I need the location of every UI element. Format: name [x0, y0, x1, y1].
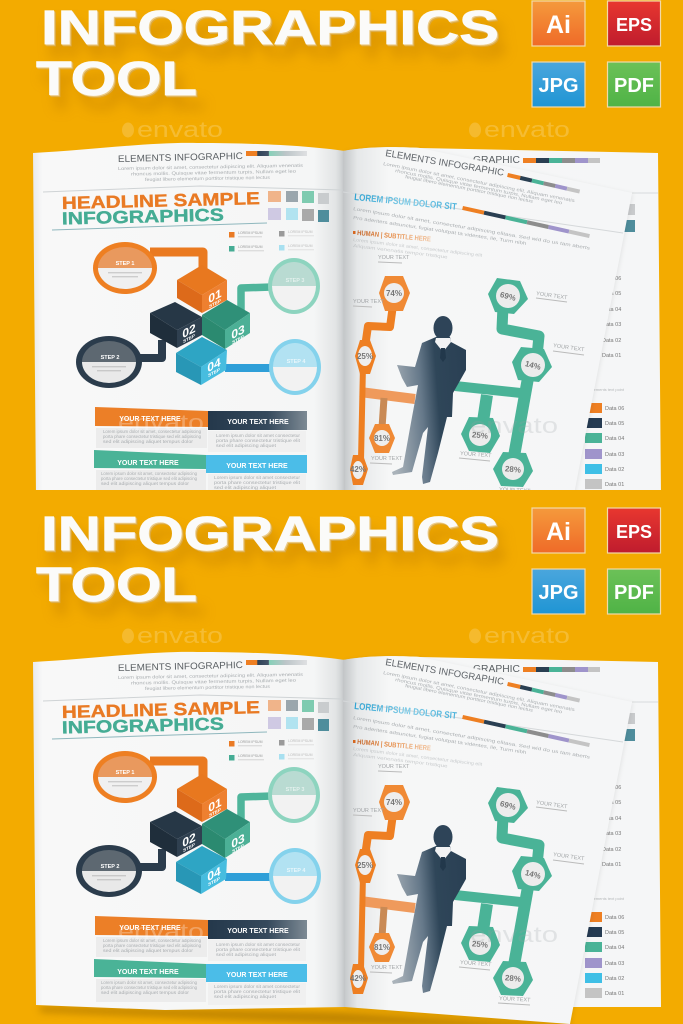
- section heading: LOREM IPSUM DOLOR SIT: [354, 701, 457, 722]
- callout labels: YOUR TEXT: [536, 291, 568, 301]
- page header: Lorem ipsum dolor sit amet, consectetur adipiscing elit. Aliquam venenatis: [118, 672, 304, 680]
- page header: Lorem ipsum dolor sit amet, consectetur adipiscing elit. Aliquam venenatis: [118, 163, 304, 171]
- hexagon 25% orange: [355, 849, 376, 883]
- hexagon 14%: 14%: [524, 868, 542, 881]
- section heading: Pro aderiters adsunctur, fugiat volutpat ta videntes, lie, Turm nibh: [353, 215, 527, 246]
- step 3 circle: [268, 767, 320, 823]
- cube 02: STEP: [183, 842, 196, 854]
- step 1 circle: [93, 242, 157, 294]
- legend: LOREM IPSUM: [288, 739, 313, 743]
- legend swatches: Data 01: [605, 991, 624, 997]
- legend swatches: Data 04: [605, 945, 624, 951]
- teal tree: [455, 278, 552, 487]
- watermarks: bottom: envato: [484, 623, 570, 648]
- icon: PDF bottom: PDF: [614, 582, 654, 604]
- data labels: Data 01: [602, 862, 621, 868]
- left page: [33, 652, 345, 1010]
- data labels: Elements text point: [590, 896, 625, 901]
- hexagon 69%: 69%: [499, 290, 517, 303]
- legend swatches: [585, 403, 624, 489]
- book spread: bottom: [33, 652, 661, 1024]
- hexagon 25% orange: 25%: [357, 352, 373, 361]
- legend swatches: Data 01: [605, 482, 624, 488]
- step 3 circle: [268, 258, 320, 314]
- hexagon 42%: 42%: [350, 465, 366, 474]
- text blocks: [96, 937, 306, 1005]
- hexagon 74%: 74%: [386, 289, 402, 298]
- legend swatches: Data 02: [605, 976, 624, 982]
- watermark on page: envato: [470, 413, 558, 438]
- text blocks: Lorem ipsum dolor sit amet consectetur: [214, 475, 300, 480]
- cube 04: [176, 337, 227, 385]
- data labels: Data 04: [602, 816, 621, 822]
- right page: back sheet: GRAPHIC: [473, 664, 520, 675]
- right page: back sheet: [343, 656, 661, 1007]
- businessman silhouette: [392, 316, 466, 484]
- headline: [52, 697, 267, 739]
- cube 03: STEP: [232, 334, 245, 346]
- data labels: [590, 785, 625, 901]
- step 4 circle: STEP 4: [287, 868, 306, 874]
- format icons: bottom: [532, 508, 660, 614]
- bar: navy: YOUR TEXT HERE: [227, 419, 289, 426]
- hexagon 25% teal: 25%: [472, 939, 488, 950]
- hexagon 81%: [369, 424, 395, 453]
- front header: Lorem ipsum dolor sit amet, consectetur adipiscing elit. Aliquam venenatis: [383, 161, 576, 203]
- cube 04: STEP: [208, 876, 221, 888]
- watermarks: bottom: [122, 623, 570, 648]
- cube 04: 04: [207, 863, 221, 884]
- step 2 circle: [76, 336, 142, 388]
- callout labels: YOUR TEXT: [460, 451, 492, 459]
- cube 01: STEP: [209, 807, 222, 819]
- cube 04: [176, 846, 227, 894]
- data labels: Data 06: [602, 276, 621, 282]
- legend: [229, 230, 314, 252]
- text blocks: porta phare consectetur tristique elit: [216, 947, 301, 952]
- swatches: [268, 191, 329, 222]
- data labels: [594, 276, 624, 392]
- callout labels: YOUR TEXT: [371, 456, 403, 462]
- callout labels: YOUR TEXT: [499, 996, 531, 1004]
- icon: Ai: Ai: [546, 11, 571, 39]
- title: bottom: INFOGRAPHICS: [41, 507, 499, 561]
- hexagon 25% orange: [355, 340, 376, 374]
- text blocks: [96, 428, 300, 490]
- hexagon 81%: 81%: [374, 434, 390, 443]
- callout labels: YOUR TEXT: [353, 808, 385, 814]
- subtitle: [353, 739, 483, 769]
- section heading: [353, 192, 591, 251]
- front header: [343, 148, 623, 233]
- front header: rhoncus mollis. Quisque vitae fermentum turpis, Nullam eget leo: [395, 168, 563, 206]
- text blocks: porta phare consectetur tristique sed elit adipiscing: [103, 434, 201, 439]
- callout labels: YOUR TEXT: [553, 852, 585, 862]
- section heading: Lorem ipsum dolor sit amet, consectetur adipiscing elitasa. Sed wid do us tam aberts: [353, 715, 591, 760]
- subtitle: Aliquam venenatis tempor tristique: [353, 243, 448, 260]
- bar: blue: YOUR TEXT HERE: [226, 463, 288, 470]
- legend: LOREM IPSUM: [288, 753, 313, 757]
- callout labels: YOUR TEXT: [460, 960, 492, 968]
- title: bottom: [36, 507, 499, 612]
- headline: INFOGRAPHICS: [62, 205, 224, 228]
- cube 02: 02: [182, 829, 196, 850]
- data labels: Elements text point: [590, 387, 625, 392]
- left page: [33, 143, 345, 501]
- right page: back sheet: GRAPHIC: [473, 155, 520, 166]
- bar: orange: YOUR TEXT HERE: [119, 925, 181, 932]
- text blocks: Lorem ipsum dolor sit amet, consectetur adipiscing: [101, 471, 197, 476]
- headline: INFOGRAPHICS: [62, 714, 224, 737]
- back color bar: [523, 158, 600, 163]
- text blocks: sed elit adipiscing aliquet tempus dolor: [101, 990, 190, 995]
- title: top: TOOL: [36, 52, 197, 106]
- watermarks: top: envato: [484, 117, 570, 142]
- bar: navy: YOUR TEXT HERE: [227, 928, 289, 935]
- cube 02: [150, 811, 202, 857]
- step 1 circle: STEP 1: [116, 770, 134, 776]
- legend: LOREM IPSUM: [238, 245, 263, 249]
- icon: Ai bottom: Ai: [546, 518, 571, 546]
- right page: front sheet: [343, 147, 632, 515]
- hexagon 42%: [350, 455, 368, 485]
- hexagon 28%: [493, 961, 533, 996]
- cube 03: 03: [231, 830, 245, 851]
- hexagon 42%: [350, 964, 368, 994]
- cube 01: [177, 265, 227, 313]
- hexagon 14%: 14%: [524, 359, 542, 372]
- page header: [43, 151, 343, 192]
- bar: orange: [95, 407, 208, 427]
- hexagon 25% teal: [461, 417, 500, 453]
- step 4 circle: [269, 339, 321, 395]
- legend: LOREM IPSUM: [288, 244, 313, 248]
- swatches: [268, 700, 329, 731]
- headline: HEADLINE SAMPLE: [62, 188, 260, 213]
- title: bottom: TOOL: [36, 558, 197, 612]
- hexagon 28%: 28%: [505, 973, 521, 984]
- right page: front sheet: [343, 656, 632, 1024]
- watermark on left page: envato: [118, 410, 204, 435]
- hexagon 74%: [379, 785, 410, 820]
- hexagon 69%: [488, 278, 528, 314]
- cube 02: STEP: [183, 333, 196, 345]
- text blocks: Lorem ipsum dolor sit amet consectetur: [214, 984, 300, 989]
- hexagon 74%: [379, 276, 410, 311]
- callout labels: YOUR TEXT: [353, 299, 385, 305]
- subtitle: [353, 230, 483, 260]
- legend: LOREM IPSUM: [238, 754, 263, 758]
- data labels: Data 05: [602, 800, 621, 806]
- subtitle: Lorem ipsum dolor sit amet, consectetur adipiscing elit: [353, 746, 483, 767]
- legend swatches: Data 02: [605, 467, 624, 473]
- connectors: [140, 252, 272, 368]
- text blocks: sed elit adipiscing aliquet: [216, 443, 277, 448]
- text blocks: sed elit adipiscing aliquet tempus dolor: [103, 948, 194, 953]
- callout labels: YOUR TEXT: [553, 343, 585, 353]
- bar: navy: [208, 411, 307, 430]
- page header: [43, 660, 343, 701]
- bar: blue: YOUR TEXT HERE: [226, 972, 288, 979]
- hexagon 14%: [512, 347, 552, 382]
- callout labels: [353, 255, 585, 496]
- right page: back sheet: [343, 147, 661, 498]
- text bars: [94, 916, 307, 982]
- connectors: [140, 761, 272, 877]
- text blocks: Lorem ipsum dolor sit amet, consectetur adipiscing: [103, 938, 201, 943]
- text blocks: porta phare consectetur tristique sed elit adipiscing: [103, 943, 201, 948]
- headline: HEADLINE SAMPLE: [62, 697, 260, 722]
- cube 04: STEP: [208, 367, 221, 379]
- page header: ELEMENTS INFOGRAPHIC: [118, 660, 243, 674]
- cube 01: 01: [208, 285, 222, 306]
- step 1 circle: [93, 751, 157, 803]
- legend: [229, 739, 314, 760]
- data labels: Data 06: [602, 785, 621, 791]
- orange tree: [350, 785, 415, 994]
- front header: Lorem ipsum dolor sit amet, consectetur adipiscing elit. Aliquam venenatis: [383, 670, 576, 712]
- step 2 circle: STEP 2: [101, 864, 119, 870]
- hexagon 14%: [512, 856, 552, 891]
- back color bar: [523, 667, 600, 672]
- legend: LOREM IPSUM: [288, 230, 313, 234]
- watermarks: top: [122, 117, 570, 142]
- orange tree: [350, 276, 415, 485]
- legend swatches: Data 04: [605, 436, 624, 442]
- text blocks: porta phare consectetur tristique elit: [216, 438, 301, 443]
- cube 02: [150, 302, 202, 348]
- data labels: Data 03: [602, 322, 621, 328]
- data labels: Data 02: [602, 847, 621, 853]
- teal tree: [455, 787, 552, 996]
- watermarks: top: envato: [137, 117, 223, 142]
- data labels: Data 03: [602, 831, 621, 837]
- hexagon 25% teal: 25%: [472, 430, 488, 441]
- callout labels: YOUR TEXT: [378, 764, 410, 770]
- callout labels: YOUR TEXT: [499, 487, 531, 495]
- text blocks: Lorem ipsum dolor sit amet, consectetur adipiscing: [103, 429, 201, 434]
- icon: PDF: PDF: [614, 75, 654, 97]
- cube 01: STEP: [209, 298, 222, 310]
- data labels: Data 04: [602, 307, 621, 313]
- cube 03: 03: [231, 321, 245, 342]
- icon: JPG: JPG: [538, 75, 579, 97]
- front header: feugiat libero elementum porttitor tristique non lectus: [405, 174, 534, 204]
- watermark on left page: envato: [118, 919, 204, 944]
- callout labels: YOUR TEXT: [371, 965, 403, 971]
- text blocks: Lorem ipsum dolor sit amet consectetur: [216, 433, 300, 438]
- hexagon 25% orange: 25%: [357, 861, 373, 870]
- text blocks: Lorem ipsum dolor sit amet, consectetur adipiscing: [101, 980, 197, 985]
- legend: LOREM IPSUM: [238, 740, 263, 744]
- text bars: [94, 407, 307, 473]
- section heading: [353, 701, 591, 760]
- front header: ELEMENTS INFOGRAPHIC: [385, 148, 505, 179]
- subtitle: Aliquam venenatis tempor tristique: [353, 752, 448, 769]
- watermarks: bottom: envato: [137, 623, 223, 648]
- book shadow: bottom: [40, 1006, 570, 1024]
- hexagon 81%: [369, 933, 395, 962]
- hexagon 74%: 74%: [386, 798, 402, 807]
- subtitle: Lorem ipsum dolor sit amet, consectetur adipiscing elit: [353, 237, 483, 258]
- bar: teal: YOUR TEXT HERE: [117, 460, 179, 467]
- hexagon 25% teal: [461, 926, 500, 962]
- cube 01: 01: [208, 794, 222, 815]
- bar: navy: [208, 920, 307, 939]
- bar: teal: [94, 959, 206, 978]
- step 3 circle: STEP 3: [286, 787, 304, 793]
- section heading: Lorem ipsum dolor sit amet, consectetur adipiscing elitasa. Sed wid do us tam aberts: [353, 206, 591, 251]
- format icons: top: [532, 1, 660, 107]
- hexagon 42%: 42%: [350, 974, 366, 983]
- text blocks: porta phare consectetur tristique elit: [214, 989, 301, 994]
- page header: ELEMENTS INFOGRAPHIC: [118, 151, 243, 165]
- step 1 circle: STEP 1: [116, 261, 134, 267]
- bar: blue: [206, 455, 307, 473]
- cube 02: 02: [182, 320, 196, 341]
- bar: orange: [95, 916, 208, 936]
- text blocks: sed elit adipiscing aliquet tempus dolor: [101, 481, 190, 486]
- front header: rhoncus mollis. Quisque vitae fermentum turpis, Nullam eget leo: [395, 677, 563, 715]
- bar: teal: [94, 450, 206, 469]
- data labels: Data 05: [602, 291, 621, 297]
- section heading: LOREM IPSUM DOLOR SIT: [354, 192, 457, 213]
- text blocks: sed elit adipiscing aliquet: [214, 994, 277, 999]
- icon: EPS bottom: EPS: [616, 522, 652, 542]
- data labels: Data 01: [602, 353, 621, 359]
- cube 03: [202, 809, 250, 858]
- icon: JPG bottom: JPG: [538, 582, 579, 604]
- front header: [343, 657, 623, 742]
- watermark on page: envato: [470, 922, 558, 947]
- subtitle: HUMAN | SUBTITLE HERE: [357, 230, 431, 243]
- headline: [52, 188, 267, 230]
- cube 01: [177, 774, 227, 822]
- text blocks: porta phare consectetur tristique elit: [214, 480, 301, 485]
- text blocks: Lorem ipsum dolor sit amet consectetur: [216, 942, 300, 947]
- legend swatches: Data 05: [605, 421, 624, 427]
- hexagon 28%: 28%: [505, 464, 521, 475]
- step 2 circle: STEP 2: [101, 355, 119, 361]
- legend swatches: Data 05: [605, 930, 624, 936]
- step 4 circle: STEP 4: [287, 359, 306, 365]
- front header: feugiat libero elementum porttitor tristique non lectus: [405, 683, 534, 713]
- text blocks: porta phare consectetur tristique sed elit adipiscing: [101, 476, 197, 481]
- hexagon 28%: [493, 452, 533, 487]
- legend swatches: Data 03: [605, 961, 624, 967]
- callout labels: YOUR TEXT: [536, 800, 568, 810]
- data labels: Data 02: [602, 338, 621, 344]
- front header: ELEMENTS INFOGRAPHIC: [385, 657, 505, 688]
- legend swatches: Data 06: [605, 915, 624, 921]
- legend swatches: Data 03: [605, 452, 624, 458]
- step 4 circle: [269, 848, 321, 904]
- bar: blue: [206, 964, 307, 982]
- book spread: top: [33, 143, 661, 515]
- title: top: INFOGRAPHICS: [41, 1, 499, 55]
- hexagon 69%: [488, 787, 528, 823]
- legend: LOREM IPSUM: [238, 231, 263, 235]
- page header: rhoncus mollis. Quisque vitae fermentum turpis, Nullam eget leo: [131, 169, 297, 176]
- icon: EPS: EPS: [616, 15, 652, 35]
- hexagon 81%: 81%: [374, 943, 390, 952]
- cube 03: STEP: [232, 843, 245, 855]
- step 3 circle: STEP 3: [286, 278, 304, 284]
- businessman silhouette: [392, 825, 466, 993]
- bar: teal: YOUR TEXT HERE: [117, 969, 179, 976]
- step 2 circle: [76, 845, 142, 897]
- title: top: [36, 1, 499, 106]
- subtitle: HUMAN | SUBTITLE HERE: [357, 739, 431, 752]
- cube 03: [202, 300, 250, 349]
- page header: feugiat libero elementum porttitor tristique non lectus: [145, 175, 271, 182]
- page header: rhoncus mollis. Quisque vitae fermentum turpis, Nullam eget leo: [131, 678, 297, 685]
- legend swatches: Data 06: [605, 406, 624, 412]
- text blocks: sed elit adipiscing aliquet: [216, 952, 277, 957]
- bar: orange: YOUR TEXT HERE: [119, 416, 181, 423]
- section heading: Pro aderiters adsunctur, fugiat volutpat ta videntes, lie, Turm nibh: [353, 724, 527, 755]
- hexagon 69%: 69%: [499, 799, 517, 812]
- text blocks: sed elit adipiscing aliquet: [214, 485, 277, 490]
- callout labels: YOUR TEXT: [378, 255, 410, 261]
- cube 04: 04: [207, 354, 221, 375]
- callout labels: [353, 764, 585, 1005]
- legend swatches: [585, 912, 624, 998]
- page header: feugiat libero elementum porttitor tristique non lectus: [145, 684, 271, 691]
- text blocks: porta phare consectetur tristique sed elit adipiscing: [101, 985, 197, 990]
- text blocks: sed elit adipiscing aliquet tempus dolor: [103, 439, 194, 444]
